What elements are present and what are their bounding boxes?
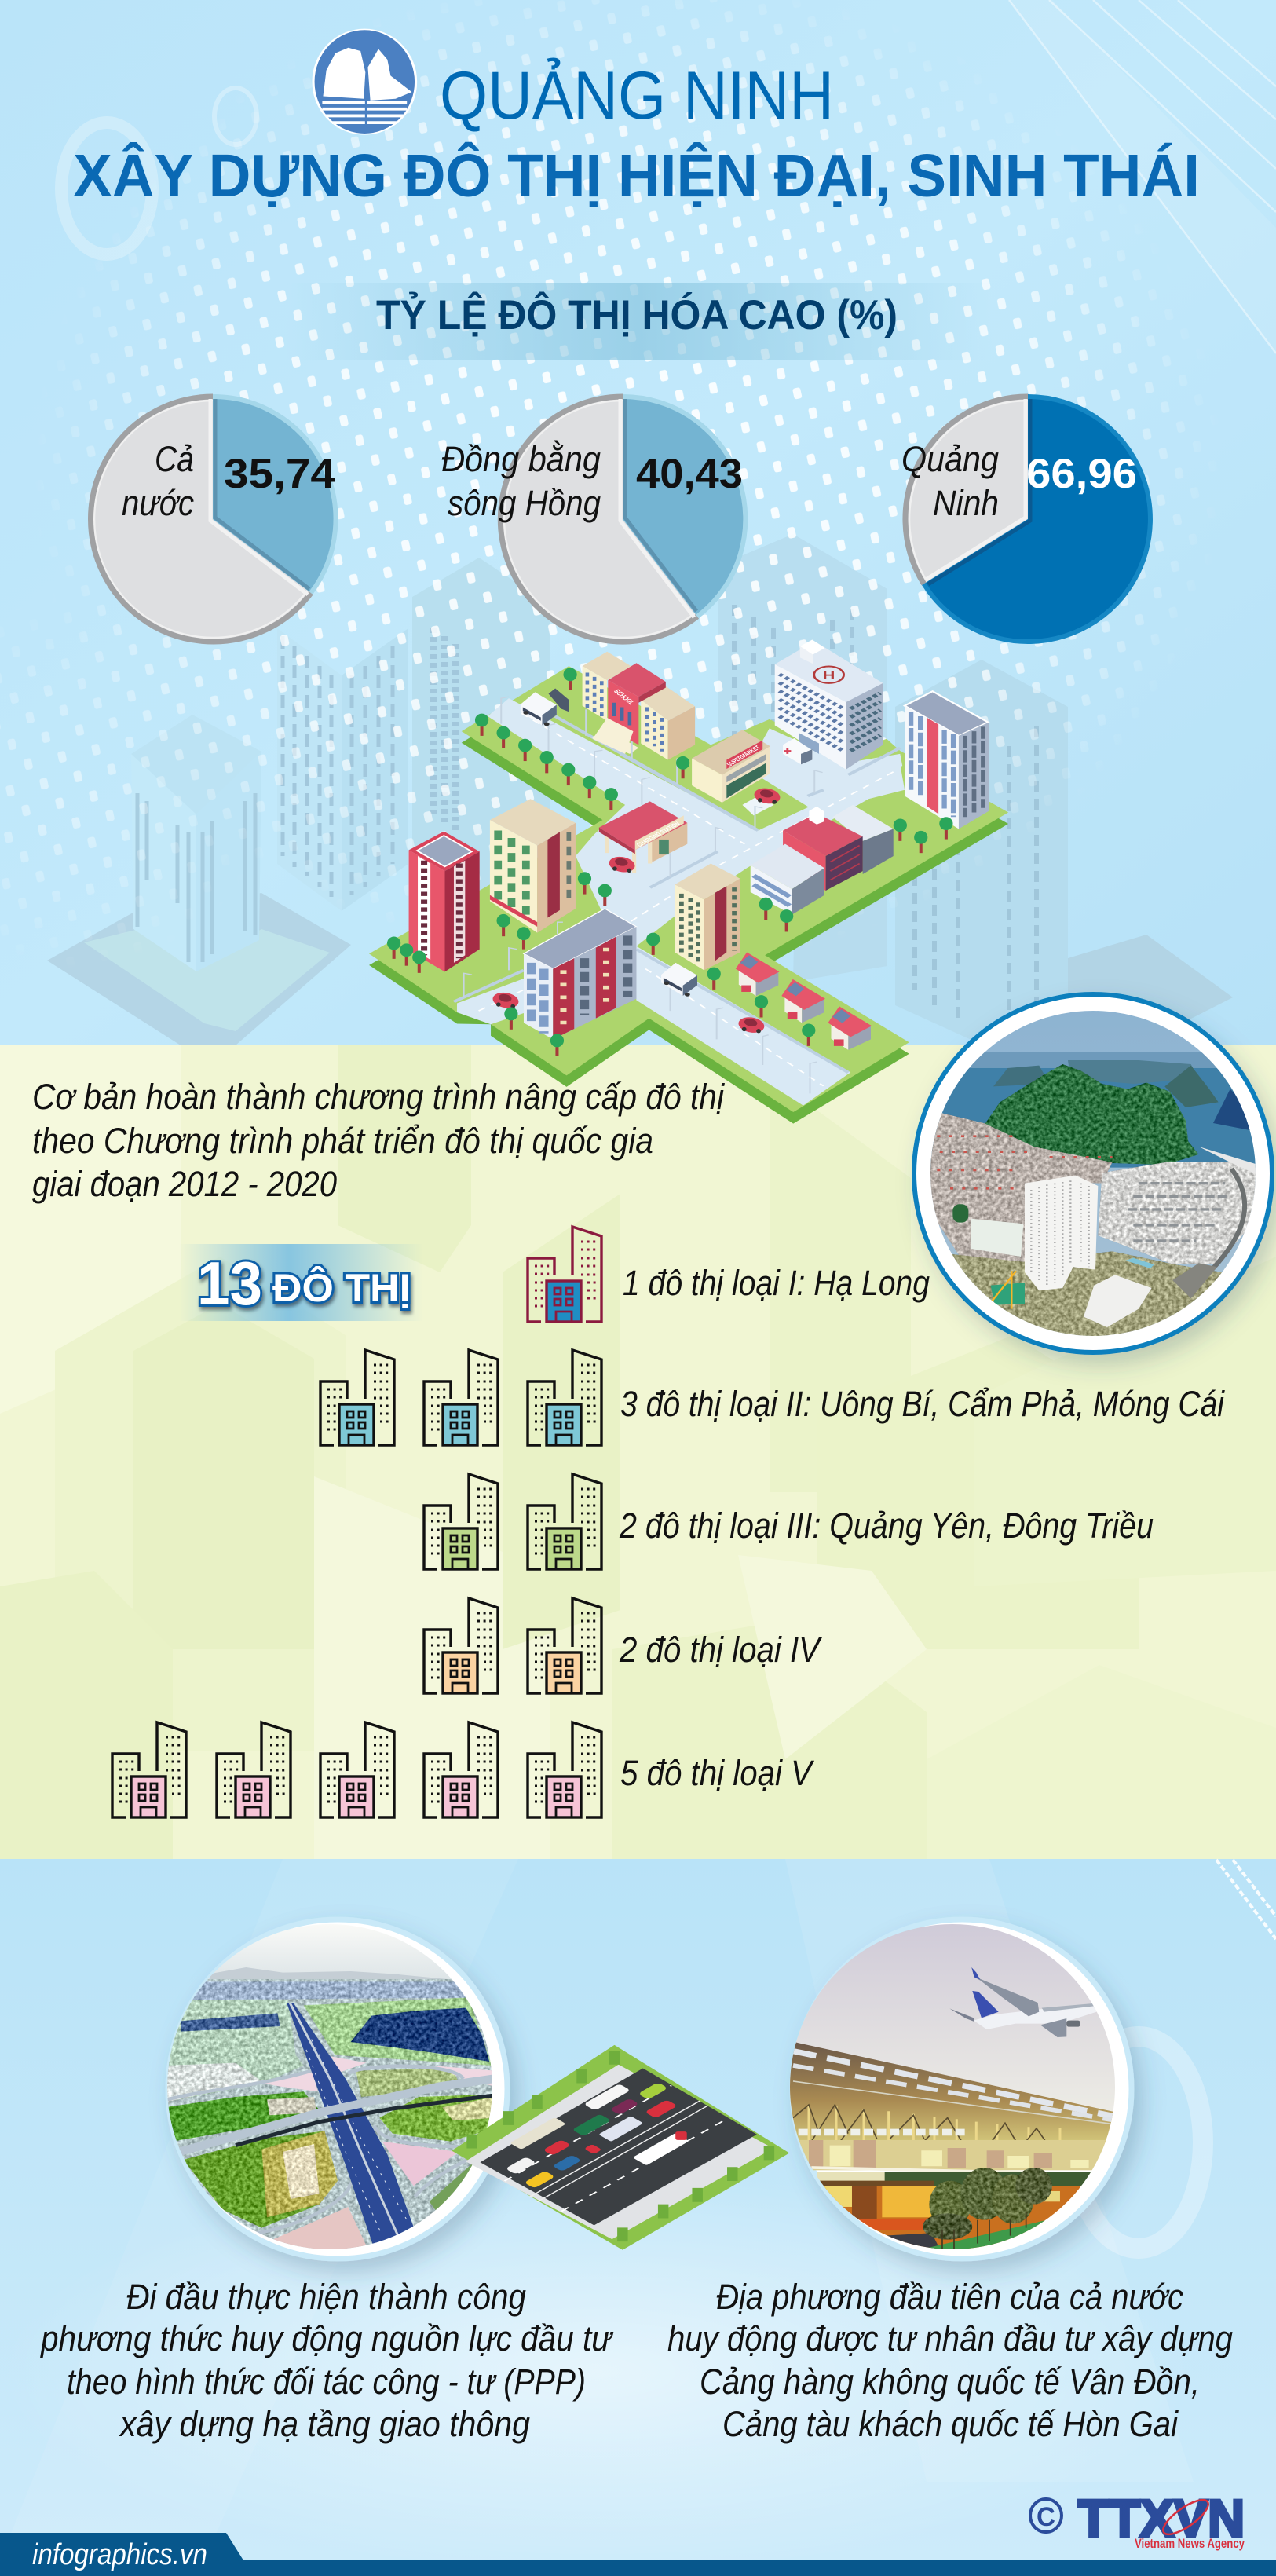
- row: urban type IV: [424, 1598, 823, 1693]
- callout: 13 đô thị: ĐÔ THỊ: [272, 1265, 411, 1310]
- building: supermarket: [692, 730, 770, 803]
- text: PPP caption: theo hình thức đối tác công - tư (PPP): [67, 2362, 586, 2402]
- building: charging station: [599, 801, 687, 875]
- houses row: [736, 952, 872, 1050]
- pie chart: Cả nước 35,74: Cả: [155, 439, 194, 479]
- text: private investment caption: [667, 2277, 1233, 2444]
- building: hospital: H: [823, 669, 835, 682]
- logo: TTXVN: TTXVN: [1078, 2489, 1245, 2547]
- text: private investment caption: Cảng hàng không quốc tế Vân Đồn,: [700, 2362, 1200, 2402]
- pie chart: Quảng Ninh 66,96: 66,96: [1026, 451, 1137, 497]
- text: PPP caption: xây dựng hạ tầng giao thông: [119, 2404, 530, 2444]
- illustration: road with vehicles: [452, 2045, 789, 2250]
- building: cream apartment block: [490, 799, 576, 933]
- footer bar: infographics.vn: [0, 2533, 1276, 2576]
- intro text: theo Chương trình phát triển đô thị quốc gia: [32, 1121, 653, 1161]
- pie chart: Quảng Ninh 66,96: Ninh: [933, 483, 999, 523]
- background: white dot field: [0, 0, 1192, 920]
- building: hospital: [775, 639, 883, 770]
- panel: infrastructure section background: [0, 1859, 1276, 2576]
- building: school: [583, 652, 695, 760]
- trees: [387, 714, 952, 1056]
- footer bar: infographics.vn: infographics.vn: [32, 2538, 207, 2571]
- building: supermarket: SUPERMARKET: [725, 744, 762, 767]
- pie chart: Cả nước 35,74: [91, 397, 336, 642]
- building: mixed-use complex: [751, 805, 894, 915]
- building: grey-blue apartment: [524, 909, 636, 1039]
- building: charging station: CHARGING STATION: [634, 821, 682, 848]
- row: urban type I: 1 đô thị loại I: Hạ Long: [623, 1263, 930, 1303]
- intro text: giai đoạn 2012 - 2020: [32, 1164, 337, 1204]
- ghost city background: [47, 534, 1233, 1045]
- intro text: Cơ bản hoàn thành chương trình nâng cấp đô thị: [32, 1077, 726, 1117]
- vehicles on road: [506, 2082, 689, 2189]
- row: urban type V: 5 đô thị loại V: [620, 1753, 815, 1793]
- row: urban type III: [424, 1474, 1154, 1569]
- row: urban type II: [320, 1350, 1226, 1445]
- text: PPP caption: phương thức huy động nguồn lực đầu tư: [39, 2318, 614, 2358]
- row: urban type III: 2 đô thị loại III: Quảng Yên, Đông Triều: [619, 1506, 1154, 1546]
- heading: urbanization rate: [285, 283, 993, 360]
- row: urban type IV: 2 đô thị loại IV: [619, 1630, 823, 1670]
- pie chart: Đồng bằng sông Hồng 40,43: sông Hồng: [448, 483, 601, 523]
- intro text: [32, 1077, 726, 1204]
- icon: Quảng Ninh logo: [313, 29, 416, 134]
- logo: TTXVN: Vietnam News Agency: [1135, 2536, 1245, 2551]
- row: urban type I: [528, 1227, 930, 1322]
- text: private investment caption: Cảng tàu khách quốc tế Hòn Gai: [722, 2404, 1179, 2444]
- callout: 13 đô thị: 13: [197, 1249, 262, 1318]
- callout: 13 đô thị: [179, 1244, 423, 1321]
- text: private investment caption: Địa phương đầu tiên của cả nước: [716, 2277, 1183, 2317]
- text: PPP caption: Đi đầu thực hiện thành công: [126, 2277, 526, 2317]
- photo: highway interchange: [165, 1919, 507, 2259]
- photo: Vân Đồn airport: [788, 1919, 1132, 2259]
- pie chart: Cả nước 35,74: nước: [122, 483, 194, 523]
- pie chart: Quảng Ninh 66,96: [901, 397, 1150, 642]
- heading: urbanization rate: TỶ LỆ ĐÔ THỊ HÓA CAO (%): [376, 291, 898, 338]
- building: school: SCHOOL: [612, 688, 637, 706]
- pie chart: Đồng bằng sông Hồng 40,43: 40,43: [636, 451, 743, 497]
- building: cream tower center: [675, 864, 740, 970]
- building: tall tower: [905, 691, 989, 829]
- icon: airplane: [949, 1967, 1097, 2037]
- text: PPP caption: [39, 2277, 614, 2444]
- pie chart: Đồng bằng sông Hồng 40,43: Đồng bằng: [441, 439, 601, 479]
- photo: Hạ Long aerial view: [914, 994, 1272, 1352]
- background: top sky panel: [0, 0, 1276, 1056]
- vehicle: ambulance: [783, 738, 812, 764]
- title: Xây dựng đô thị hiện đại, sinh thái: XÂY DỰNG ĐÔ THỊ HIỆN ĐẠI, SINH THÁI: [73, 141, 1200, 210]
- panel: urban upgrade section background: [0, 1045, 1276, 1860]
- illustration: isometric city: [369, 639, 1008, 1124]
- logo: TTXVN: C: [1037, 2502, 1055, 2532]
- pie chart: Đồng bằng sông Hồng 40,43: [441, 397, 745, 642]
- building: red tower: [409, 832, 480, 971]
- pie chart: Quảng Ninh 66,96: Quảng: [901, 439, 999, 479]
- pie chart: Cả nước 35,74: 35,74: [224, 451, 336, 497]
- title: Quảng Ninh: QUẢNG NINH: [440, 58, 834, 134]
- row: urban type V: [112, 1722, 815, 1817]
